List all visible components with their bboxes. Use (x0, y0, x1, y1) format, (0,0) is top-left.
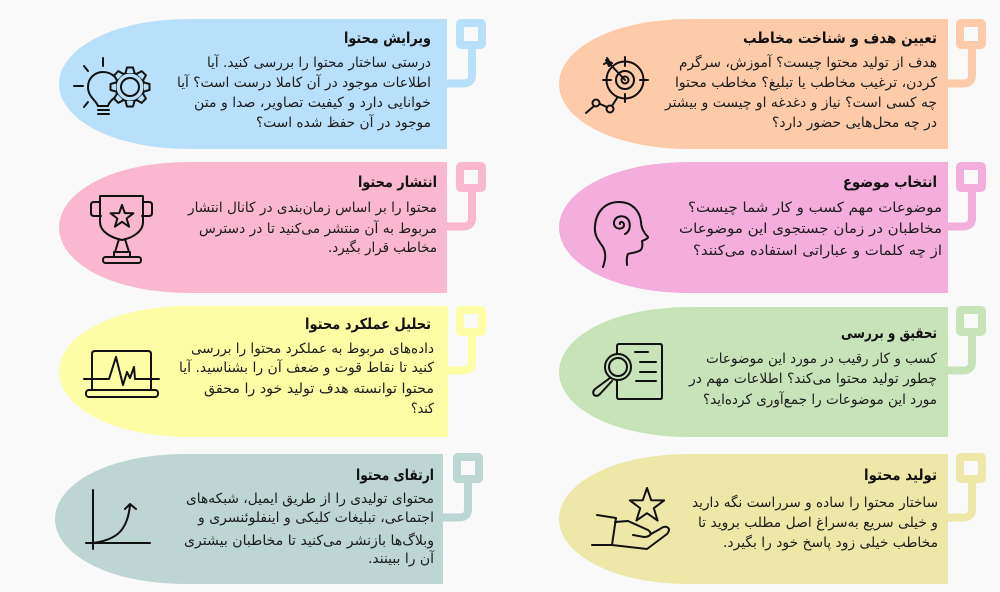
text block: مورد این موضوعات را جمع‌آوری کرده‌اید؟ (703, 391, 937, 408)
connector (443, 457, 479, 518)
text block: مخاطب خیلی زود پاسخ خود را بگیرد. (723, 534, 938, 551)
heading: تحقیق و بررسی (841, 324, 937, 342)
text block: کند؟ (411, 401, 434, 417)
text block: مخاطبان در زمان جستجوی این موضوعات (679, 221, 942, 237)
panel: editing (59, 19, 482, 149)
text block: اطلاعات موجود در آن کاملا درست است؟ آیا (177, 74, 431, 91)
connector (948, 23, 982, 84)
text block: مخاطب قرار بگیرد. (328, 239, 437, 256)
icon: head with spiral (595, 202, 648, 267)
icon: hand holding star (592, 488, 669, 549)
heading: ویرایش محتوا (344, 29, 431, 47)
text block: موضوعات مهم کسب و کار شما چیست؟ (688, 200, 942, 216)
heading: تعیین هدف و شناخت مخاطب (743, 29, 937, 47)
text block (664, 54, 937, 131)
text block: محتوا توانسته هدف تولید خود را محقق (204, 381, 434, 397)
icon: growth chart (86, 490, 150, 549)
heading: انتشار محتوا (358, 173, 437, 191)
text block: کسب و کار رقیب در مورد این موضوعات (706, 351, 937, 367)
text block: در چه محل‌هایی حضور دارد؟ (772, 115, 937, 131)
icon: document and magnifier (593, 344, 662, 399)
text block: موجود در آن حفظ شده است؟ (256, 114, 431, 131)
card shape (59, 19, 447, 149)
card shape (559, 19, 948, 149)
text block (179, 341, 434, 417)
panel: topic selection (559, 162, 982, 293)
heading: انتخاب موضوع (843, 173, 937, 191)
text block (692, 494, 938, 551)
connector (948, 457, 982, 518)
text block (688, 351, 937, 408)
text block: آن را ببینند. (368, 550, 435, 567)
card shape (59, 306, 448, 437)
text block: کردن، ترغیب مخاطب یا تبلیغ؟ مخاطب محتوا (675, 75, 937, 91)
card shape (559, 162, 948, 293)
icon: bulb and gear (74, 58, 150, 114)
text block: مربوط به آن منتشر می‌کنید تا در دسترس (199, 220, 437, 237)
icon: trophy (91, 196, 152, 263)
text block: اجتماعی، تبلیغات کلیکی و اینفلوئنسری و (197, 510, 434, 526)
connector (948, 166, 982, 226)
text block (177, 54, 431, 131)
card shape (55, 454, 443, 584)
text block: محتوا را بر اساس زمان‌بندی در کانال انتشار (187, 200, 437, 216)
text block: درستی ساختار محتوا را بررسی کنید. آیا (207, 54, 431, 71)
text block: چه کسی است؟ نیاز و دغدغه او چیست و بیشتر (664, 95, 937, 111)
text block: محتوای تولیدی را از طریق ایمیل، شبکه‌های (186, 491, 434, 507)
heading: تحلیل عملکرد محتوا (305, 315, 431, 333)
icon: laptop with pulse (84, 351, 159, 397)
text block: و خیلی سریع به‌سراغ اصل مطلب بروید تا (698, 515, 938, 531)
card shape (559, 454, 948, 584)
text block: هدف از تولید محتوا چیست؟ آموزش، سرگرم (679, 54, 937, 71)
text block: ساختار محتوا را ساده و سرراست نگه دارید (692, 494, 938, 511)
panel: research (559, 307, 982, 437)
connector (447, 166, 482, 226)
text block: چطور تولید محتوا می‌کند؟ اطلاعات مهم در (688, 371, 937, 387)
text block: خوانایی دارد و کیفیت تصاویر، صدا و متن (194, 95, 431, 111)
panel: performance analysis (59, 306, 482, 437)
panel: audience goal (559, 19, 982, 149)
connector (448, 310, 482, 370)
text block: وبلاگ‌ها بازنشر می‌کنید تا مخاطبان بیشتری (184, 531, 434, 549)
text block (679, 200, 942, 259)
card shape (59, 162, 447, 293)
text block: کنید تا نقاط قوت و ضعف آن را بشناسید. آیا (179, 359, 434, 376)
panel: promotion (55, 454, 479, 584)
text block: از چه کلمات و عباراتی استفاده می‌کنند؟ (693, 243, 942, 259)
heading: تولید محتوا (864, 466, 937, 484)
connector (948, 310, 982, 370)
text block (187, 200, 437, 256)
panel: content production (559, 454, 982, 584)
text block (184, 491, 435, 567)
panel: publishing (59, 162, 482, 293)
connector (447, 23, 482, 84)
heading: ارتقای محتوا (356, 466, 434, 484)
card shape (559, 307, 948, 437)
text block: داده‌های مربوط به عملکرد محتوا را بررسی (191, 341, 434, 357)
icon: target (586, 57, 648, 113)
